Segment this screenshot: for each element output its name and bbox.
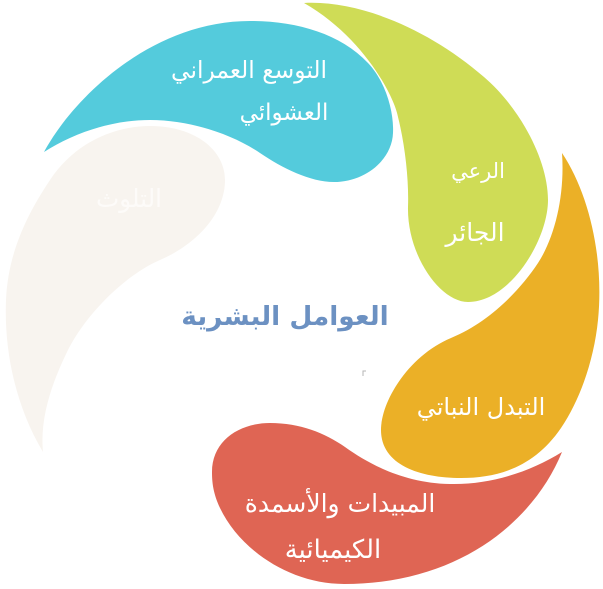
panel: overgrazing petal: الرعي [451, 159, 505, 183]
panel: urban sprawl petal [44, 21, 393, 182]
panel: vegetation change petal: التبدل النباتي [417, 393, 545, 421]
panel: urban sprawl petal: العشوائي [240, 100, 328, 126]
panel: overgrazing petal: الجائر [443, 218, 505, 247]
panel: pollution petal [6, 126, 225, 452]
panel: pesticides and fertilizers petal: الكيميائية [285, 535, 381, 565]
panel: overgrazing petal [304, 3, 548, 302]
panel: pesticides and fertilizers petal [212, 423, 562, 584]
title: العوامل البشرية [181, 301, 389, 332]
panel: vegetation change petal [381, 153, 599, 478]
small mark [363, 371, 366, 376]
panel: pesticides and fertilizers petal: المبيدات والأسمدة [245, 487, 435, 519]
panel: pollution petal: التلوث [96, 184, 162, 213]
panel: urban sprawl petal: التوسع العمراني [171, 56, 327, 84]
